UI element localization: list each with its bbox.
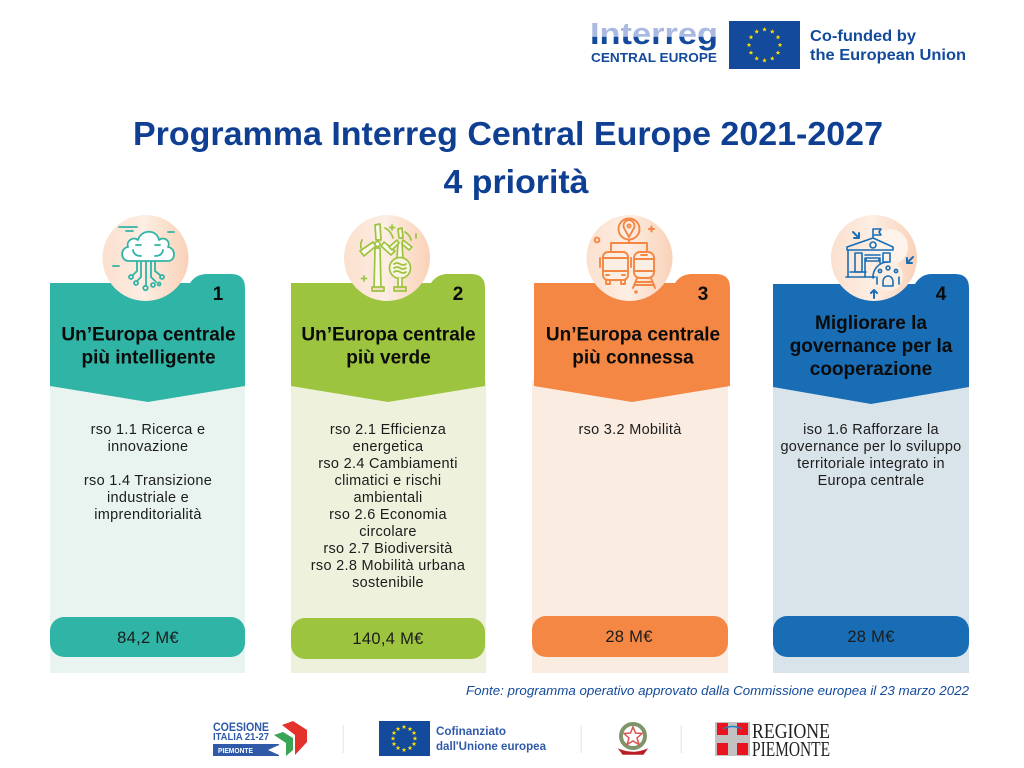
logo: EU flag bbox=[729, 21, 800, 69]
text: co-funded by the European Union: the European Union bbox=[810, 47, 966, 64]
title bbox=[133, 115, 883, 200]
heading bbox=[790, 313, 953, 380]
objectives bbox=[311, 422, 466, 591]
icon: bus and train bbox=[586, 215, 672, 301]
icon: wind turbines bbox=[344, 215, 430, 301]
title: Programma Interreg Central Europe 2021-2027 bbox=[133, 115, 883, 152]
logo: Coesione Italia: ITALIA 21-27 bbox=[213, 731, 269, 743]
objectives: rso 2.4 Cambiamenti bbox=[318, 456, 458, 472]
heading bbox=[546, 324, 720, 368]
objectives: iso 1.6 Rafforzare la bbox=[803, 422, 940, 438]
logo: Regione Piemonte: PIEMONTE bbox=[752, 737, 830, 761]
objectives: rso 3.2 Mobilità bbox=[578, 422, 682, 438]
objectives: rso 2.7 Biodiversità bbox=[323, 541, 453, 557]
objectives: rso 1.1 Ricerca e bbox=[91, 422, 205, 438]
header: priority 1 bbox=[50, 274, 245, 402]
objectives: circolare bbox=[359, 524, 417, 540]
number 1: 1 bbox=[213, 284, 224, 305]
objectives: Europa centrale bbox=[818, 473, 924, 489]
objectives: energetica bbox=[353, 439, 424, 455]
text: co-funded by the European Union bbox=[810, 28, 966, 64]
heading: più intelligente bbox=[81, 348, 216, 368]
logo: Cofinanziato EU: Cofinanziato bbox=[436, 726, 506, 738]
header: priority 3 bbox=[534, 274, 730, 402]
objectives: territoriale integrato in bbox=[797, 456, 945, 472]
budget pill: 28 M€ bbox=[605, 628, 653, 646]
heading bbox=[301, 324, 476, 368]
heading: cooperazione bbox=[810, 359, 932, 380]
number 4: 4 bbox=[936, 284, 947, 305]
source note: Fonte: programma operativo approvato dalla Commissione europea il 23 marzo 2022 bbox=[466, 684, 969, 698]
objectives: governance per lo sviluppo bbox=[780, 439, 962, 455]
logo: Cofinanziato EU bbox=[379, 721, 547, 756]
number 2: 2 bbox=[453, 284, 463, 305]
budget pill: 28 M€ bbox=[847, 628, 895, 646]
objectives: innovazione bbox=[108, 439, 188, 455]
objectives: rso 2.6 Economia bbox=[329, 507, 447, 523]
budget pill: 84,2 M€ bbox=[117, 629, 179, 647]
objectives bbox=[780, 422, 962, 489]
objectives: rso 2.1 Efficienza bbox=[330, 422, 447, 438]
objectives: industriale e bbox=[107, 490, 189, 506]
budget pill bbox=[773, 616, 969, 657]
objectives: sostenibile bbox=[352, 575, 424, 591]
logo dividers bbox=[342, 725, 682, 753]
logo: Cofinanziato EU: dall'Unione europea bbox=[436, 741, 547, 753]
logo: Coesione Italia bbox=[213, 721, 307, 756]
objectives: climatici e rischi bbox=[335, 473, 441, 489]
objectives: rso 2.8 Mobilità urbana bbox=[311, 558, 466, 574]
heading: governance per la bbox=[790, 336, 953, 357]
objectives: imprenditorialità bbox=[94, 507, 202, 523]
logo: Coesione Italia: COESIONE bbox=[213, 722, 269, 734]
title: 4 priorità bbox=[444, 163, 589, 200]
logo: Coesione Italia: PIEMONTE bbox=[218, 748, 253, 755]
objectives: ambientali bbox=[353, 490, 423, 506]
number 3: 3 bbox=[698, 284, 708, 305]
header: priority 2 bbox=[291, 274, 485, 402]
icon: cloud circuit bbox=[102, 215, 188, 301]
logo: Interreg Central Europe: CENTRAL EUROPE bbox=[591, 50, 717, 65]
panel: priority 4 bbox=[773, 215, 969, 673]
heading: Un’Europa centrale bbox=[301, 324, 476, 346]
panel: priority 3 bbox=[532, 215, 730, 673]
header: priority 4 bbox=[773, 274, 969, 404]
objectives: rso 1.4 Transizione bbox=[84, 473, 212, 489]
logo: Regione Piemonte bbox=[715, 719, 830, 761]
heading: Un’Europa centrale bbox=[61, 324, 236, 346]
panel: priority 2 bbox=[291, 215, 486, 673]
budget pill: 140,4 M€ bbox=[352, 630, 424, 648]
logo: Interreg Central Europe: Interreg bbox=[590, 16, 718, 51]
budget pill bbox=[50, 617, 245, 657]
icon: Italian emblem bbox=[620, 724, 646, 754]
text: co-funded by the European Union: Co-funded by bbox=[810, 28, 916, 45]
heading: più connessa bbox=[572, 348, 694, 368]
budget pill bbox=[291, 618, 485, 659]
heading: più verde bbox=[346, 348, 431, 368]
icon: governance building bbox=[831, 215, 917, 301]
logo: Regione Piemonte: REGIONE bbox=[752, 719, 830, 743]
heading: Migliorare la bbox=[815, 313, 927, 334]
objectives bbox=[84, 422, 212, 523]
panel: priority 1 bbox=[50, 215, 245, 673]
logo: Interreg Central Europe bbox=[590, 16, 718, 65]
heading bbox=[61, 324, 236, 368]
budget pill bbox=[532, 616, 728, 657]
heading: Un’Europa centrale bbox=[546, 324, 720, 346]
